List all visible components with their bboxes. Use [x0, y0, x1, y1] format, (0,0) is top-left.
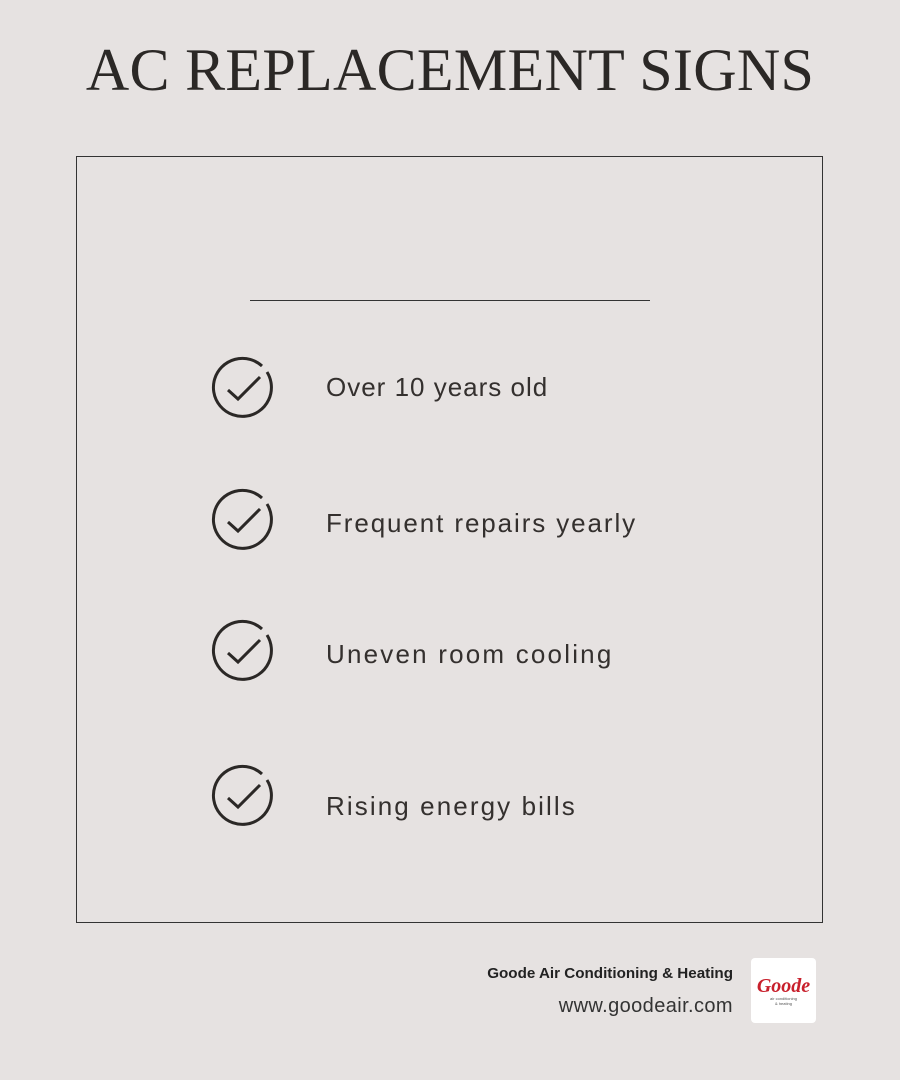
icon: check 1	[212, 356, 273, 418]
logo: air conditioning	[770, 996, 797, 1001]
logo: & heating	[775, 1001, 792, 1006]
text 3: Uneven room cooling	[326, 639, 614, 669]
logo	[751, 958, 816, 1023]
icon: check 4	[212, 764, 273, 826]
footer: url: www.goodeair.com	[559, 995, 733, 1017]
icon: check 2	[212, 488, 273, 550]
icon: check 3	[212, 620, 273, 681]
text 2: Frequent repairs yearly	[326, 508, 637, 538]
text 1: Over 10 years old	[326, 372, 548, 402]
text 4: Rising energy bills	[326, 791, 577, 821]
title: AC REPLACEMENT SIGNS	[86, 37, 814, 103]
logo: Goode	[757, 975, 810, 997]
panel: checklist	[76, 156, 823, 923]
footer: company name: Goode Air Conditioning & Heating	[487, 965, 733, 982]
